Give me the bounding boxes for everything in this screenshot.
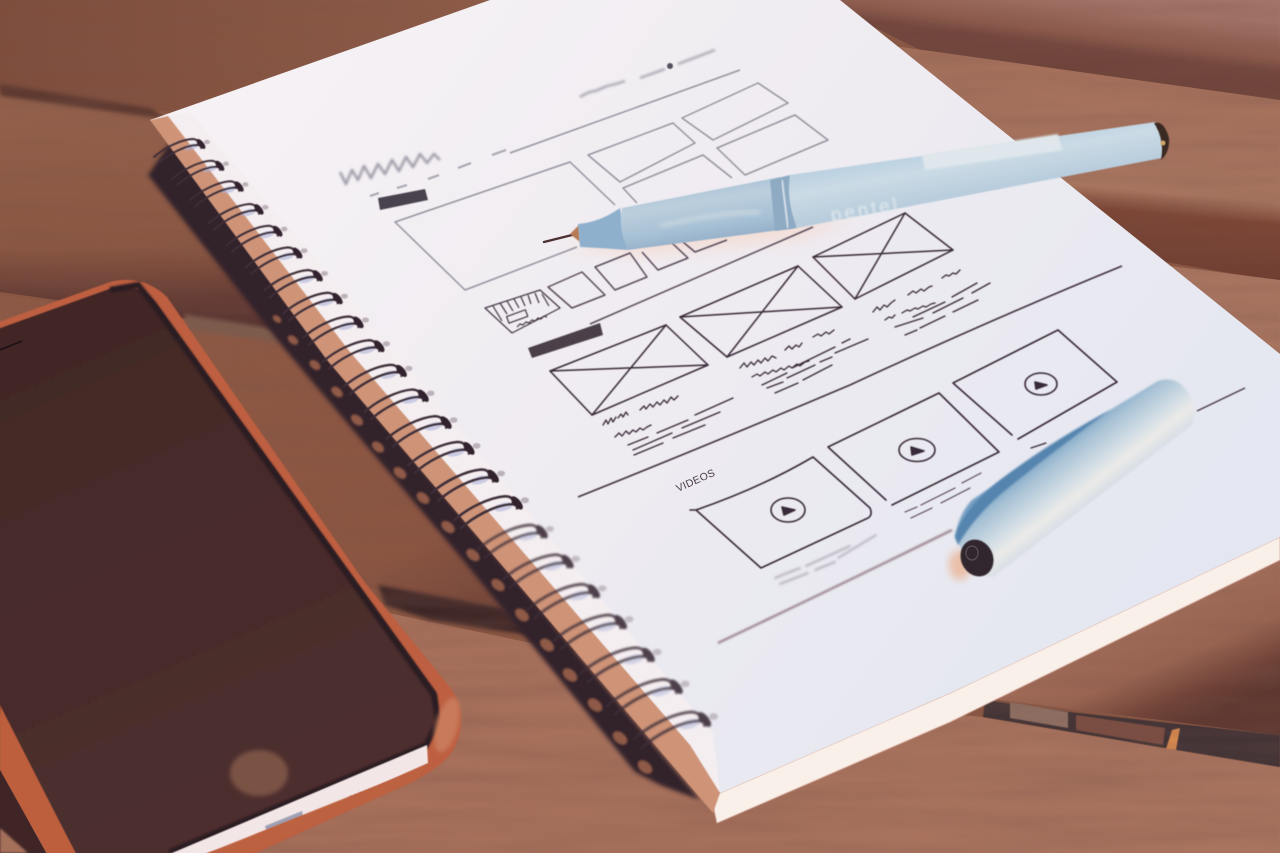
videos heading: VIDEOS <box>674 467 717 495</box>
video 3 caption <box>1031 443 1046 448</box>
image box 4 <box>717 115 828 175</box>
card 3 <box>813 213 953 299</box>
home button <box>230 750 288 796</box>
ledge near phone <box>183 314 300 345</box>
card 2 caption <box>740 330 868 393</box>
video card 2 <box>828 393 999 505</box>
gap: lower right dark <box>983 700 1280 767</box>
lower divider right <box>1197 388 1245 411</box>
top menu scribble <box>580 50 715 97</box>
thumbnail 2 <box>548 272 605 308</box>
video card 3 <box>953 330 1117 439</box>
pen grip <box>621 177 795 250</box>
lower divider left <box>718 530 952 643</box>
thumbnail 3 <box>595 253 647 290</box>
smartphone <box>0 280 465 853</box>
image box 1 <box>588 123 695 182</box>
nav dashes <box>370 150 506 196</box>
dark area below left strip <box>0 770 48 853</box>
pen end metal glint <box>1160 140 1166 146</box>
cap end <box>954 534 1000 582</box>
dark section bar <box>528 323 603 358</box>
pen cap <box>949 379 1194 582</box>
copper tip cone <box>570 225 580 242</box>
paper thickness band <box>712 537 1280 823</box>
wireframe sketch: top section <box>340 50 828 290</box>
card 2 <box>680 266 842 357</box>
pen shadow on paper <box>560 215 860 252</box>
plank: top right <box>820 0 1280 100</box>
pen label <box>922 134 1062 170</box>
plank: upper left <box>0 92 420 352</box>
grey block under table <box>1010 702 1068 728</box>
phone screen <box>0 287 440 853</box>
screen dark edge <box>110 285 438 852</box>
pen brand text: pentel <box>829 194 902 227</box>
wood corner bottom left <box>0 828 28 853</box>
thumbnail 4 <box>642 243 688 270</box>
shadow band <box>148 140 700 800</box>
cap clip <box>955 409 1112 545</box>
wireframe sketch: thumbnails row <box>485 227 813 333</box>
pen <box>544 122 1169 250</box>
case highlight corner <box>429 695 465 755</box>
gap shadow: centre left <box>378 585 560 640</box>
cap body <box>955 379 1194 577</box>
spiral binding <box>154 138 718 748</box>
brown block under table <box>1076 715 1165 745</box>
page strip near holes <box>165 112 720 793</box>
wireframe sketch: image cards <box>550 213 990 455</box>
logo scribble <box>340 154 440 184</box>
plank: top left <box>0 0 620 140</box>
card 3 caption <box>873 270 990 335</box>
phone case <box>0 280 461 853</box>
pen cone <box>578 208 628 250</box>
pen needle tip <box>544 235 572 242</box>
speaker grille <box>350 773 416 798</box>
rings lower <box>478 523 718 748</box>
binding edge strip <box>150 116 720 813</box>
pen ring band <box>770 175 797 231</box>
cap end detail <box>966 546 978 560</box>
thumbnail 5 <box>683 240 727 252</box>
wireframe sketch: videos section <box>690 330 1117 584</box>
plank: bottom <box>0 590 1280 853</box>
hero box <box>395 162 615 290</box>
left top plank shadow <box>0 84 170 120</box>
lower case strip <box>200 765 428 853</box>
rings upper <box>154 138 529 528</box>
plank: middle left <box>0 295 620 640</box>
video 1 caption <box>775 535 876 584</box>
video card 1 <box>690 457 871 568</box>
dark label bar top <box>378 189 428 210</box>
spiral shadow on the table <box>148 140 700 800</box>
menu dot <box>667 63 673 69</box>
cap shadow <box>949 550 971 580</box>
orange sliver <box>1166 728 1180 750</box>
plank: right middle <box>1140 262 1280 370</box>
grip highlight <box>660 212 760 226</box>
plank: upper right <box>880 44 1280 282</box>
white phone edge <box>165 745 428 853</box>
wood seen through ring loops <box>271 313 655 777</box>
hatched thumbnail <box>485 290 560 333</box>
pen barrel <box>789 122 1163 228</box>
image box 3 <box>682 83 788 140</box>
divider line <box>578 266 1122 497</box>
header line <box>510 70 740 153</box>
video 2 caption <box>905 473 981 518</box>
plank: lower right <box>880 500 1280 735</box>
thin top screen line <box>0 341 22 350</box>
card 1 caption <box>603 396 733 455</box>
pen ring highlight <box>782 180 788 228</box>
row line <box>590 227 813 324</box>
pen end cap <box>1154 123 1169 160</box>
image box 2 <box>623 155 732 203</box>
card 1 <box>550 325 708 415</box>
charging port <box>265 811 304 836</box>
left case strip <box>0 705 77 853</box>
